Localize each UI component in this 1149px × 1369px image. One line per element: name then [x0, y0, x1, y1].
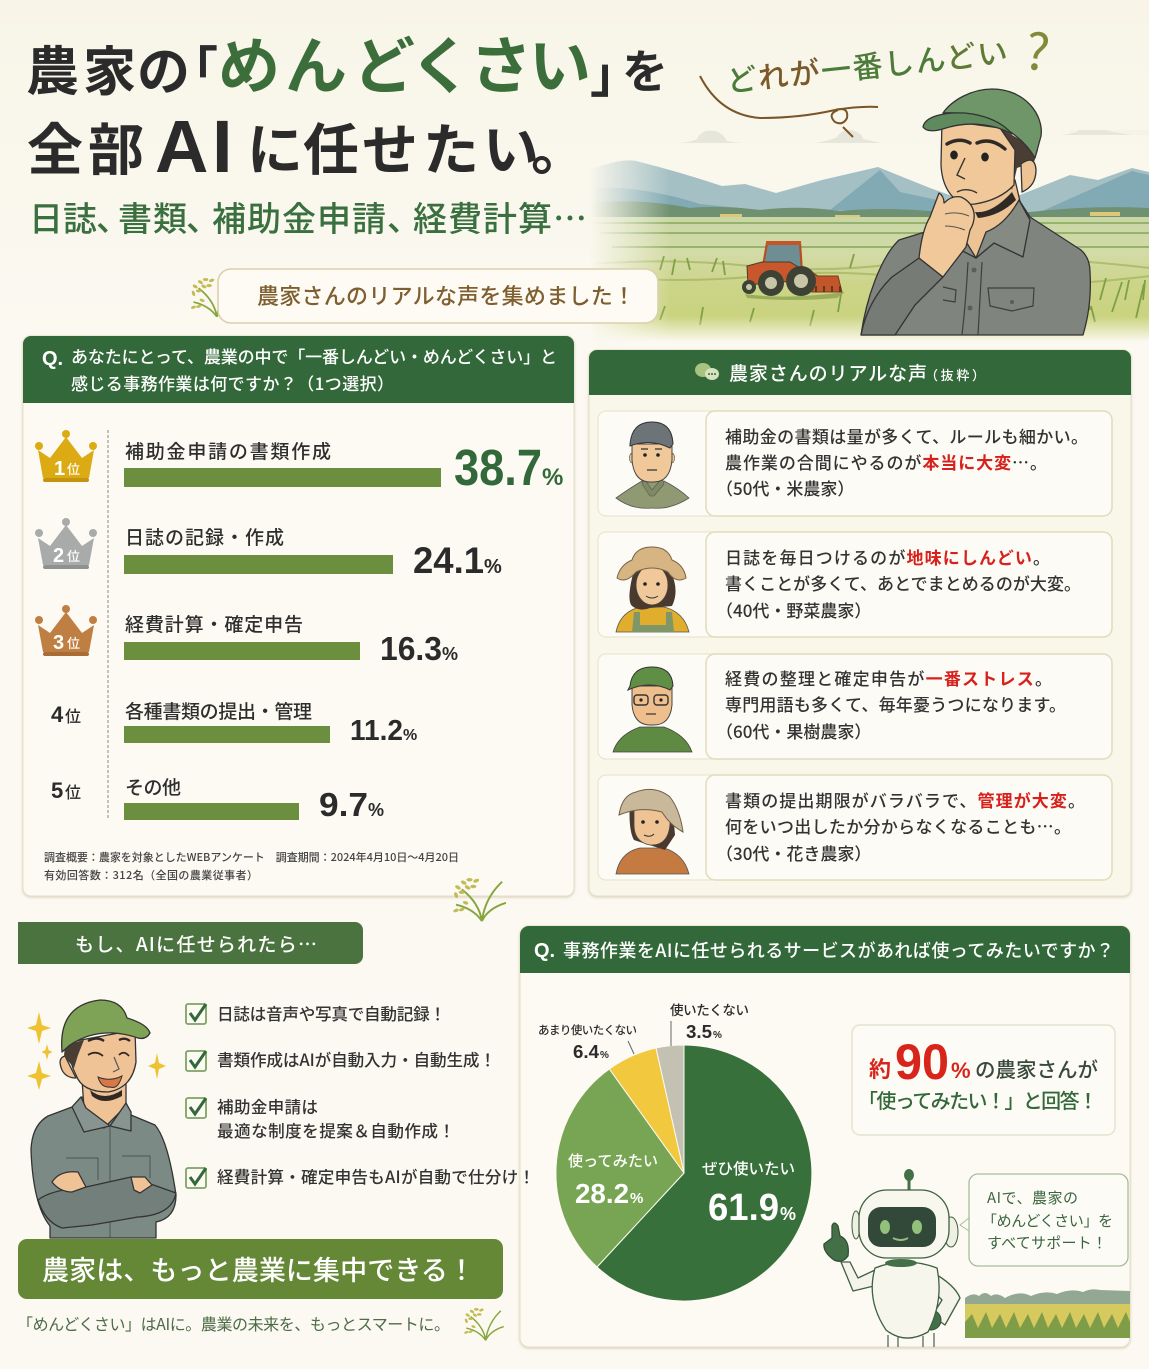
cap	[62, 1000, 150, 1052]
robot bubble: 「めんどくさい」を	[982, 1210, 1113, 1231]
left arm pointing	[841, 1262, 878, 1291]
check item: subsidy	[186, 1094, 455, 1142]
torso	[872, 1262, 939, 1338]
pill: real voices	[191, 269, 658, 323]
robot bubble: AIで、農家の	[987, 1187, 1078, 1208]
handwritten speech: which is the hardest: ?	[1021, 12, 1054, 86]
shirt	[861, 200, 1090, 335]
pie label: rather not: %	[600, 1050, 609, 1061]
head	[852, 1211, 860, 1239]
icon: crown 3rd	[35, 605, 97, 656]
rank 4 label	[51, 702, 81, 727]
bar: diary 24.1%: %	[484, 556, 502, 578]
rank 4 label: 4	[51, 702, 64, 727]
voice card 2: 日誌を毎日つけるのが地味にしんどい。	[725, 544, 1050, 569]
pill: real voices: 農家さんのリアルな声を集めました！	[257, 279, 635, 311]
pie label: rather not	[538, 1022, 637, 1062]
panel header: （抜粋）	[925, 365, 985, 384]
bar: other 9.7%: 9.7	[319, 786, 368, 823]
pockets and placket	[66, 1126, 150, 1238]
icon: crown 1st	[35, 430, 97, 482]
pie label: want to use	[568, 1150, 658, 1209]
voice card 3: 専門用語も多くて、毎年憂うつになります。	[725, 691, 1066, 716]
smile	[88, 1038, 130, 1041]
voice card 2: 書くことが多くて、あとでまとめるのが大変。	[725, 570, 1081, 595]
title: 「	[168, 31, 218, 103]
survey notes: 調査概要：農家を対象としたWEBアンケート 調査期間：2024年4月10日〜4月20日	[44, 849, 459, 865]
avatar: vegetable farmer	[616, 547, 689, 632]
bar: subsidy documents 38.7%: 38.7	[454, 439, 542, 496]
voice card 2: （40代・野菜農家）	[716, 597, 871, 622]
robot bubble	[960, 1174, 1128, 1266]
slice: do not use 3.5%	[656, 1045, 684, 1173]
hair	[64, 1040, 84, 1068]
bar: submission 11.2%: 各種書類の提出・管理	[125, 697, 312, 724]
title: AI	[155, 105, 233, 188]
icon: crown 3rd: 3	[53, 632, 64, 654]
forearm sleeve	[861, 258, 943, 335]
right arm	[930, 1272, 960, 1325]
bar: diary 24.1%	[124, 523, 502, 581]
pie label: rather not: あまり使いたくない	[538, 1022, 637, 1038]
panel header: 農家さんのリアルな声	[729, 359, 927, 386]
bar: submission 11.2%	[124, 697, 417, 747]
bar: other 9.7%	[124, 773, 384, 823]
panel header: Q.	[534, 940, 555, 962]
callout: about 90%: 90	[895, 1034, 949, 1090]
cap brim	[923, 113, 1012, 134]
shirt details	[943, 262, 1034, 335]
pie label: do not use: 3.5	[686, 1022, 712, 1042]
slice: definitely use 61.9%	[597, 1045, 812, 1301]
pie chart	[556, 1045, 812, 1301]
legs	[888, 1333, 934, 1347]
voice card 4	[598, 775, 1112, 880]
avatar: fruit farmer	[613, 667, 692, 752]
slice: rather not 6.4%	[609, 1048, 684, 1173]
bar: expenses 16.3%: 経費計算・確定申告	[125, 610, 303, 637]
title: 」	[590, 35, 640, 107]
pie label: do not use: 使いたくない	[670, 999, 749, 1019]
icon: crown 3rd: 位	[67, 633, 80, 652]
bar: subsidy documents 38.7%	[124, 437, 563, 496]
callout: about 90%: %	[951, 1058, 971, 1083]
title: に任せたい	[247, 106, 539, 187]
ear	[1021, 160, 1036, 192]
icon: crown 1st: 位	[67, 459, 80, 478]
checklist	[186, 1001, 535, 1188]
rank 5 label: 位	[65, 779, 81, 803]
bar: other 9.7%: その他	[125, 773, 181, 800]
bar: submission 11.2%: 11.2	[350, 715, 403, 747]
bar: subsidy documents 38.7%: 補助金申請の書類作成	[125, 437, 331, 464]
check item: subsidy: 最適な制度を提案＆自動作成！	[217, 1118, 455, 1142]
panel header	[520, 926, 1130, 973]
pie label: rather not: 6.4	[573, 1042, 599, 1062]
bar: diary 24.1%: 24.1	[413, 540, 484, 581]
panel header	[589, 350, 1131, 395]
handwritten speech: which is the hardest	[700, 12, 1054, 137]
icon: chat bubbles	[695, 363, 719, 380]
facial features	[947, 140, 1005, 149]
slice: want to use 28.2%	[556, 1069, 684, 1267]
curved flourish	[700, 76, 878, 137]
bar: other 9.7%: %	[368, 800, 384, 820]
icon: crown 2nd: 位	[67, 546, 80, 565]
bar: expenses 16.3%: 16.3	[380, 630, 442, 667]
tractor	[742, 241, 845, 300]
voice card 4: 何をいつ出したか分からなくなることも…。	[725, 813, 1071, 838]
hand on chin	[919, 193, 974, 277]
voice card 3: 経費の整理と確定申告が一番ストレス。	[725, 665, 1052, 690]
tagline: 「めんどくさい」はAIに。農業の未来を、もっとスマートに。	[17, 1311, 450, 1335]
voice card 1	[598, 411, 1112, 516]
collar	[976, 200, 1030, 258]
rank 4 label: 位	[65, 703, 81, 727]
pie label: do not use	[670, 999, 749, 1046]
icon: crown 2nd	[35, 518, 97, 569]
check item: subsidy: 補助金申請は	[217, 1094, 318, 1118]
check item: expenses: 経費計算・確定申告もAIが自動で仕分け！	[217, 1164, 535, 1188]
title: を	[622, 36, 668, 102]
pie label: want to use: %	[630, 1190, 643, 1207]
subtitle: 日誌、書類、補助金申請、経費計算…	[29, 192, 587, 241]
check item: diary: 日誌は音声や写真で自動記録！	[217, 1001, 446, 1025]
callout: about 90%: 「使ってみたい！」と回答！	[858, 1085, 1098, 1114]
panel header: あなたにとって、農業の中で「一番しんどい・めんどくさい」と	[71, 343, 557, 368]
icon: crown 2nd: 2	[53, 545, 64, 567]
panel: real voices	[589, 350, 1131, 896]
panel header	[23, 336, 574, 403]
voice card 2	[598, 532, 1112, 637]
rank 5 label	[51, 778, 81, 803]
panel header: 感じる事務作業は何ですか？（1つ選択）	[71, 370, 394, 395]
banner: if AI handled it	[18, 922, 363, 964]
collar	[72, 1097, 131, 1132]
pie label: definitely use: %	[780, 1204, 796, 1224]
hands	[52, 1172, 152, 1193]
pie label: do not use: %	[713, 1030, 722, 1041]
title: 農家の	[26, 30, 190, 106]
pie label: definitely use: ぜひ使いたい	[702, 1157, 795, 1179]
title: 。	[531, 106, 587, 187]
neck	[958, 180, 1024, 258]
banner: focus on farming	[18, 1239, 503, 1299]
voice card 4: 書類の提出期限がバラバラで、管理が大変。	[725, 787, 1085, 812]
face	[941, 120, 1015, 204]
hair back	[1000, 128, 1038, 190]
callout: about 90%	[852, 1025, 1115, 1135]
face	[70, 1030, 136, 1092]
pie label: definitely use: 61.9	[708, 1187, 779, 1229]
title: 全部	[27, 106, 144, 187]
title: めんどくさい	[218, 16, 591, 106]
antenna	[908, 1178, 910, 1195]
icon: rice plant	[453, 878, 506, 922]
voice card 1: （50代・米農家）	[716, 475, 854, 500]
icon: small rice sprig	[464, 1308, 504, 1341]
panel header: Q.	[42, 348, 63, 370]
avatar: rice farmer	[616, 422, 689, 508]
callout: about 90%: 約	[869, 1052, 891, 1084]
icon: crown 1st: 1	[54, 458, 65, 480]
bar: diary 24.1%: 日誌の記録・作成	[125, 523, 284, 550]
field strip	[965, 1289, 1130, 1338]
main farmer thinking	[861, 89, 1090, 335]
bar: expenses 16.3%: %	[442, 644, 458, 664]
shirt body	[31, 1097, 176, 1238]
panel: willingness to use	[520, 926, 1130, 1347]
title	[26, 16, 668, 188]
pie label: want to use: 28.2	[575, 1178, 629, 1209]
face screen	[868, 1207, 936, 1247]
robot bubble: すべてサポート！	[987, 1232, 1107, 1253]
handwritten speech: which is the hardest: どれが一番しんどい	[724, 28, 1009, 101]
banner: if AI handled it: もし、AIに任せられたら…	[75, 930, 317, 957]
bar: expenses 16.3%	[124, 610, 458, 667]
rank 5 label: 5	[51, 778, 63, 803]
check item: documents: 書類作成はAIが自動入力・自動生成！	[217, 1047, 496, 1071]
icon: rice sprig	[191, 278, 218, 318]
voice card 3	[598, 654, 1112, 759]
avatar: flower farmer	[616, 789, 689, 874]
panel header: 事務作業をAIに任せられるサービスがあれば使ってみたいですか？	[563, 937, 1114, 963]
voice card 1: 農作業の合間にやるのが本当に大変…。	[725, 449, 1047, 474]
survey notes: 有効回答数：312名（全国の農業従事者）	[44, 867, 258, 883]
pie label: definitely use	[702, 1157, 796, 1229]
icon: sparkles	[27, 1012, 166, 1090]
bar: submission 11.2%: %	[403, 727, 417, 744]
hero landscape	[594, 130, 1149, 340]
cap crown	[943, 89, 1041, 158]
panel: survey ranking	[23, 336, 574, 896]
callout: about 90%: の農家さんが	[975, 1053, 1098, 1083]
crossed arms	[38, 1177, 176, 1228]
neck	[82, 1080, 126, 1128]
voice card 1: 補助金の書類は量が多くて、ルールも細かい。	[725, 423, 1088, 448]
happy farmer with crossed arms	[27, 1000, 176, 1238]
voice card 3: （60代・果樹農家）	[716, 718, 871, 743]
pointing hand	[824, 1223, 848, 1261]
survey notes	[44, 849, 459, 883]
bar: subsidy documents 38.7%: %	[542, 464, 563, 491]
pie label: want to use: 使ってみたい	[568, 1150, 658, 1171]
voice card 4: （30代・花き農家）	[716, 840, 871, 865]
banner: focus on farming: 農家は、もっと農業に集中できる！	[42, 1249, 475, 1288]
ear	[60, 1056, 76, 1078]
robot mascot	[824, 1169, 960, 1347]
